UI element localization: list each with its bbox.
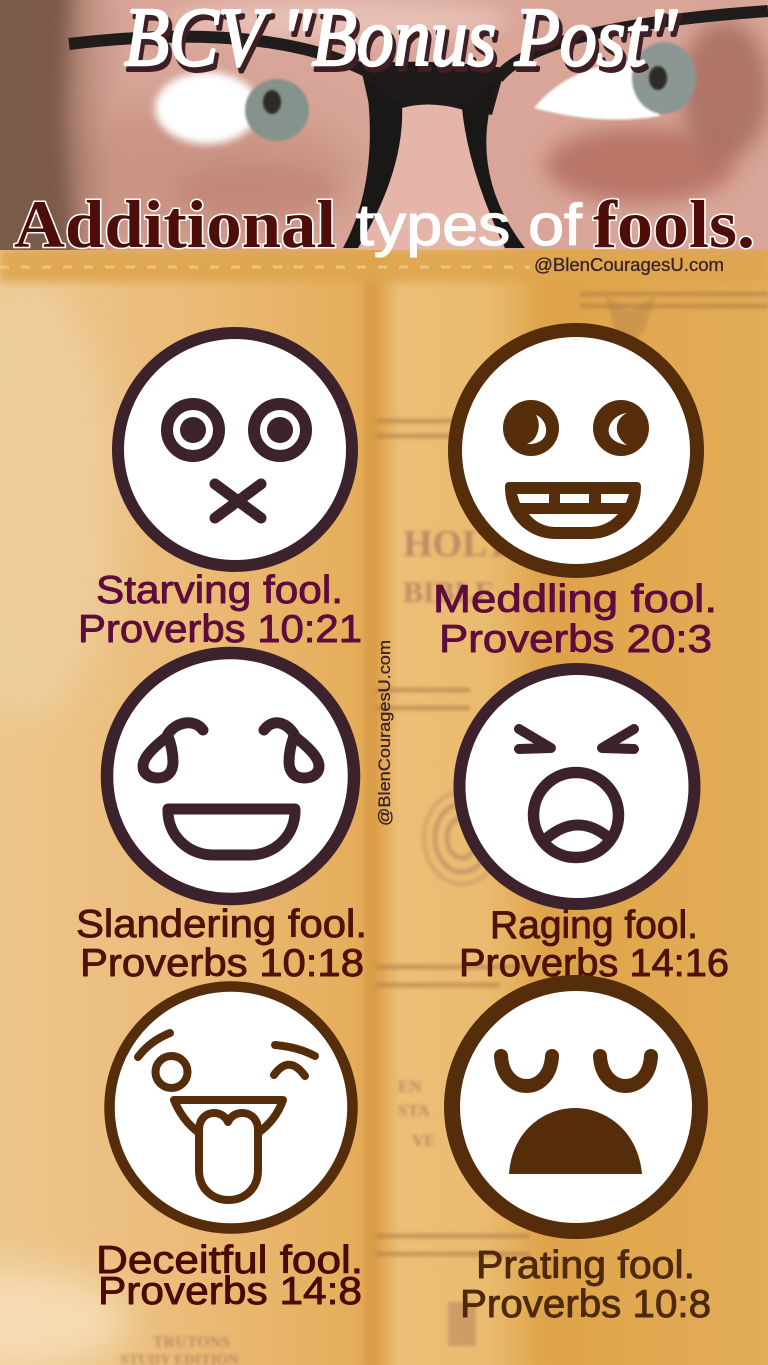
caption: meddling fool: Meddling fool. (433, 578, 717, 621)
background: book cover photo: TRUTONS (153, 1334, 230, 1351)
background: book cover photo: BIBLE (403, 576, 495, 609)
icon: laughing face with tears (107, 653, 354, 899)
subtitle: types of (356, 193, 583, 258)
icon: face with crossed-out mouth (118, 333, 352, 566)
caption: raging fool: Proverbs 14:16 (459, 942, 729, 985)
subtitle: fools. (593, 186, 755, 262)
panel: starving fool (78, 333, 362, 651)
caption: prating fool (460, 1244, 711, 1326)
subtitle: Additional (14, 186, 336, 262)
panel: deceitful fool (96, 986, 363, 1313)
caption: slandering fool (76, 903, 367, 985)
background: book cover photo: HOLY (403, 523, 511, 565)
panel: slandering fool (76, 653, 367, 985)
caption: starving fool (78, 569, 362, 651)
watermark: top: @BlenCouragesU.com (534, 255, 724, 275)
caption: starving fool: Starving fool. (96, 569, 343, 612)
caption: raging fool (459, 904, 729, 985)
caption: deceitful fool: Proverbs 14:8 (98, 1270, 362, 1313)
caption: prating fool: Prating fool. (476, 1244, 695, 1287)
caption: prating fool: Proverbs 10:8 (460, 1283, 711, 1326)
background: book cover photo: VE (412, 1131, 436, 1150)
caption: deceitful fool: Deceitful fool. (96, 1239, 363, 1282)
watermark: vertical: @BlenCouragesU.com (375, 640, 394, 826)
panel: meddling fool (433, 330, 717, 661)
caption: slandering fool: Proverbs 10:18 (80, 942, 364, 985)
caption: meddling fool (433, 578, 717, 661)
icon: grinning face with teeth (455, 330, 697, 571)
caption: starving fool: Proverbs 10:21 (78, 608, 362, 651)
icon: winking face with tongue out (110, 986, 352, 1228)
caption: raging fool: Raging fool. (490, 904, 698, 947)
caption: slandering fool: Slandering fool. (76, 903, 367, 946)
subtitle (14, 186, 755, 262)
background: book cover photo: EN (398, 1077, 422, 1096)
caption: deceitful fool (96, 1239, 363, 1313)
panel: prating fool (452, 983, 711, 1326)
caption: meddling fool: Proverbs 20:3 (439, 618, 712, 661)
background: photo of eyes and glasses peering over the book (0, 0, 768, 250)
panel: raging fool (459, 669, 729, 985)
icon: shouting angry face (460, 669, 694, 904)
background: book cover photo: STA (398, 1101, 431, 1120)
icon: yawning face with closed eyes (452, 983, 700, 1231)
